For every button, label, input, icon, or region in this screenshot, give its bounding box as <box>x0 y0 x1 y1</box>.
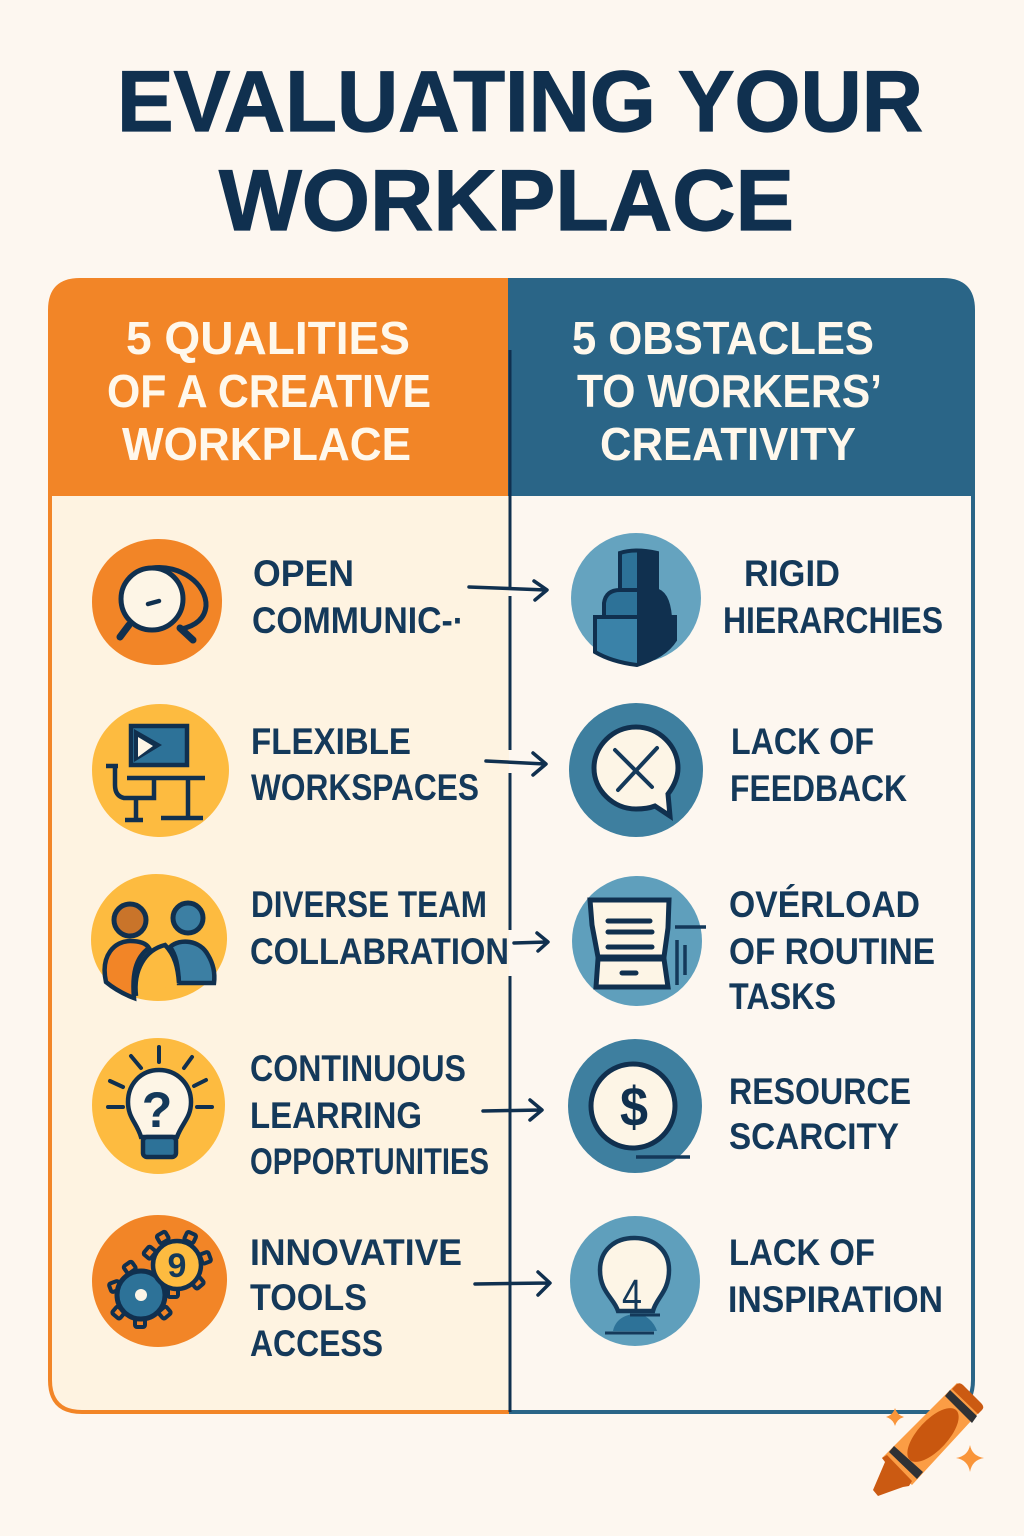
label: TASKS <box>729 976 836 1017</box>
panel: qualities body <box>50 490 509 1412</box>
icon: team members <box>91 874 227 1001</box>
arrow <box>475 1272 550 1295</box>
panel: comparison table <box>48 278 975 1412</box>
icon: small sparkle <box>886 1408 904 1426</box>
icon: large sparkle <box>956 1445 984 1472</box>
title: EVALUATING YOUR <box>117 54 923 150</box>
icon: crayon with sparkles <box>873 1383 984 1496</box>
label <box>250 1048 489 1182</box>
icon: gears <box>92 1215 227 1347</box>
panel: obstacles header <box>508 278 975 496</box>
panel: qualities header <box>48 278 509 496</box>
panel: qualities header: 5 QUALITIES <box>126 312 410 364</box>
arrow <box>469 581 547 600</box>
arrow <box>486 753 546 775</box>
icon: dollar coin: $ <box>620 1075 648 1138</box>
title: WORKPLACE <box>219 153 794 249</box>
label: COLLABRATION <box>250 931 509 972</box>
title <box>117 54 923 249</box>
label: WORKSPACES <box>251 767 479 808</box>
label: OF ROUTINE <box>729 931 935 972</box>
panel: qualities header: WORKPLACE <box>122 418 411 470</box>
icon: desk and monitor <box>92 704 229 837</box>
label <box>723 553 943 641</box>
label: LACK OF <box>729 1232 875 1273</box>
label <box>250 1232 462 1364</box>
label <box>252 553 464 641</box>
label: LACK OF <box>731 721 874 762</box>
label: RESOURCE <box>729 1071 911 1112</box>
label: DIVERSE TEAM <box>251 884 487 925</box>
label <box>728 1232 943 1320</box>
icon: lightbulb: 4 <box>622 1271 642 1320</box>
label: OVÉRLOAD <box>729 884 920 925</box>
label: LEARRING <box>250 1095 422 1136</box>
label: FEEDBACK <box>730 768 907 809</box>
icon: lightbulb with question mark <box>92 1038 225 1174</box>
icon: dollar coin <box>568 1039 702 1173</box>
icon: speech bubble with cross <box>569 703 703 837</box>
label: SCARCITY <box>729 1116 899 1157</box>
label: INSPIRATION <box>728 1279 943 1320</box>
label: HIERARCHIES <box>723 600 943 641</box>
panel: obstacles header: TO WORKERS’ <box>577 365 882 417</box>
icon: gears: 9 <box>168 1247 186 1285</box>
label: COMMUNIC-· <box>252 600 464 641</box>
label: RIGID <box>744 553 840 594</box>
row 4: continuous learning opportunities <box>92 1038 911 1182</box>
row 2: flexible workspaces <box>92 703 907 837</box>
panel: qualities header: OF A CREATIVE <box>107 365 431 417</box>
label: OPEN <box>253 553 354 594</box>
icon: lightbulb with question mark: ? <box>142 1082 172 1138</box>
row 3: diverse team collaboration <box>91 874 935 1017</box>
label: CONTINUOUS <box>250 1048 466 1089</box>
label <box>251 721 479 808</box>
label: FLEXIBLE <box>251 721 411 762</box>
icon: speech bubbles <box>92 539 222 665</box>
label <box>730 721 907 809</box>
arrow <box>483 1100 542 1120</box>
panel: obstacles header: CREATIVITY <box>600 418 856 470</box>
label <box>250 884 509 972</box>
icon: lightbulb <box>570 1216 700 1346</box>
label: TOOLS <box>250 1277 367 1318</box>
panel: obstacles header: 5 OBSTACLES <box>572 312 874 364</box>
label <box>729 884 935 1017</box>
arrow <box>514 933 548 951</box>
label: OPPORTUNITIES <box>250 1141 489 1182</box>
icon: hierarchy tower <box>571 533 701 665</box>
panel: obstacles body <box>509 490 973 1412</box>
label <box>729 1071 911 1157</box>
label: INNOVATIVE <box>250 1232 462 1273</box>
label: ACCESS <box>250 1323 383 1364</box>
row 1: open communication <box>92 533 943 665</box>
icon: paper stack <box>572 876 706 1006</box>
row 5: innovative tools access <box>92 1215 943 1364</box>
